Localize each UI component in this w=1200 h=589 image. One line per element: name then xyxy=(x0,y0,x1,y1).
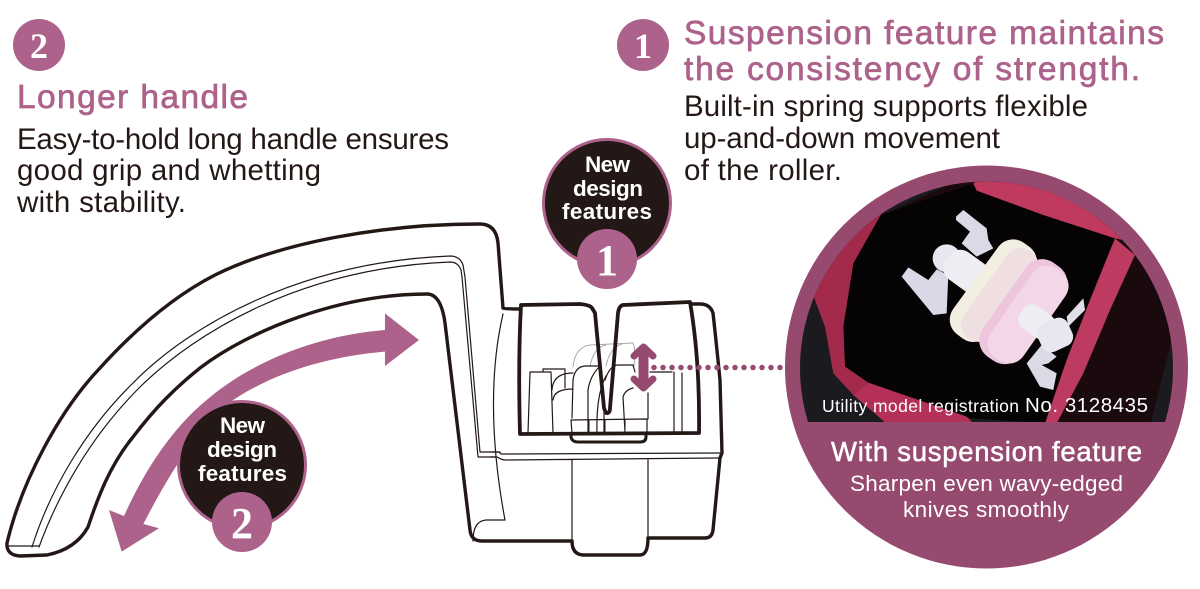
frame bottom xyxy=(853,382,972,422)
badge label: design xyxy=(207,437,277,462)
number marker 2: 2 xyxy=(30,26,48,66)
axle right xyxy=(1018,304,1054,339)
badge: new design features 2 xyxy=(178,402,306,552)
badge label xyxy=(198,413,287,486)
heading: suspension feature: the consistency of strength. xyxy=(684,51,1140,88)
description: long handle: with stability. xyxy=(16,186,186,219)
registration number: Utility model registration xyxy=(822,396,1019,416)
center tray xyxy=(571,419,647,434)
ghost roller raised position xyxy=(573,343,635,367)
frame left xyxy=(810,213,882,395)
heading: suspension feature xyxy=(684,15,1164,88)
callout description: knives smoothly xyxy=(903,497,1070,522)
axle left xyxy=(933,244,961,272)
badge number xyxy=(212,492,272,552)
section 2 text: longer handle xyxy=(13,19,449,219)
sharpener line drawing xyxy=(7,224,722,556)
badge label: New xyxy=(585,152,630,177)
arrow: handle length xyxy=(109,313,419,552)
description: built-in spring: of the roller. xyxy=(684,154,842,187)
badge number: 1 xyxy=(596,236,618,285)
callout description: Sharpen even wavy-edged xyxy=(850,471,1123,496)
number marker 2 xyxy=(13,19,65,71)
roller lines xyxy=(528,365,682,433)
badge label: New xyxy=(220,413,265,438)
photo: roller close-up xyxy=(800,182,1173,422)
description: built-in spring: Built-in spring supports flexible xyxy=(684,90,1088,123)
callout title: With suspension feature xyxy=(831,436,1142,467)
description: long handle xyxy=(16,123,449,219)
badge number xyxy=(577,229,637,289)
frame top xyxy=(973,182,1122,240)
holder lower right xyxy=(1027,345,1057,390)
dotted connector line xyxy=(654,365,782,370)
heading: longer handle: Longer handle xyxy=(17,79,248,116)
callout circle: with suspension feature xyxy=(785,160,1190,568)
roller housing xyxy=(519,302,699,434)
description: built-in spring: up-and-down movement xyxy=(684,122,1000,155)
handle foot detail xyxy=(473,520,490,541)
heading: suspension feature: Suspension feature maintains xyxy=(684,15,1164,52)
description: built-in spring xyxy=(684,90,1088,187)
number marker 1: 1 xyxy=(634,26,652,66)
badge label: design xyxy=(573,176,643,201)
pink roller xyxy=(979,259,1068,364)
badge number: 2 xyxy=(231,499,253,548)
cream roller xyxy=(950,239,1037,342)
double-headed arrow: up and down movement xyxy=(634,347,653,388)
holder left xyxy=(902,267,948,315)
handle and body outline xyxy=(7,224,722,556)
callout description xyxy=(850,471,1123,522)
section 1 text: suspension feature xyxy=(617,15,1164,187)
badge label: features xyxy=(562,199,652,224)
badge label xyxy=(562,152,652,224)
description: long handle: good grip and whetting xyxy=(17,154,321,187)
description: long handle: Easy-to-hold long handle ensures xyxy=(17,123,449,156)
holder upper xyxy=(956,210,993,257)
frame right xyxy=(1045,238,1135,423)
handle inner double line xyxy=(8,256,500,547)
number marker 1 xyxy=(617,19,669,71)
badge: new design features 1 xyxy=(544,140,670,289)
base seam xyxy=(490,314,720,541)
registration number xyxy=(822,394,1148,417)
registration number: No. 3128435 xyxy=(1025,394,1148,417)
badge label: features xyxy=(198,461,287,486)
